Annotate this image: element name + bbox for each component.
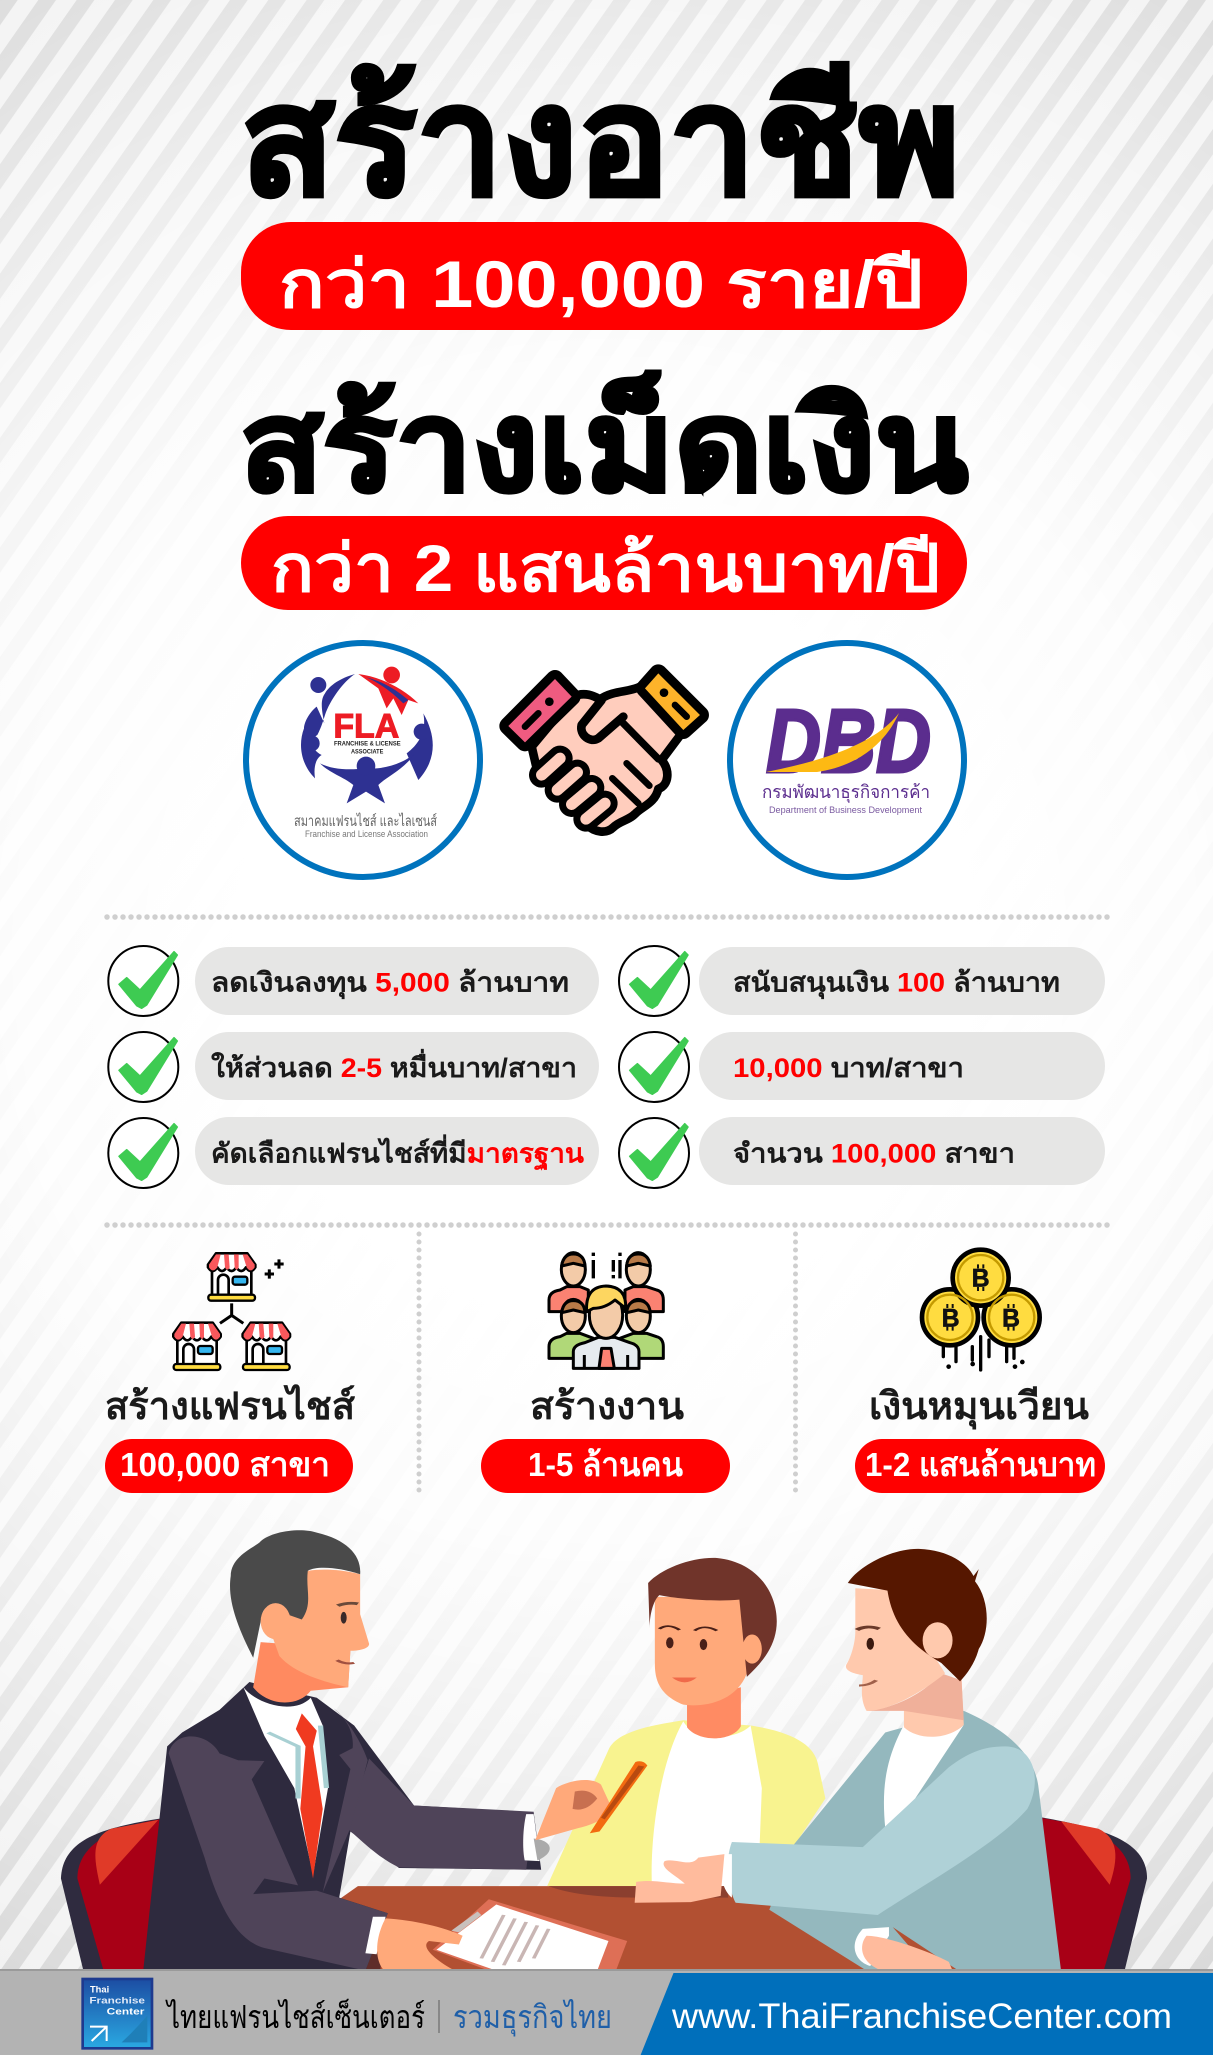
clipboard with document — [365, 1899, 627, 1971]
footer bar — [0, 1969, 1213, 2055]
checklist row 2 right — [619, 1032, 1105, 1102]
red pill: 100,000 jobs a year: กว่า 100,000 ราย/ปี — [279, 247, 923, 321]
chair right — [1039, 1817, 1147, 1971]
red pill: 2 hundred thousand million baht a year — [241, 516, 967, 610]
icon: FLA ring of figures: ASSOCIATE — [351, 749, 383, 755]
logo: FLA association badge — [246, 643, 480, 877]
stat column: franchises: 100,000 สาขา — [120, 1446, 330, 1483]
stat column: circulation — [855, 1250, 1105, 1493]
checklist row 3 left: คัดเลือกแฟรนไชส์ที่มี มาตรฐาน — [211, 1134, 585, 1172]
stat column: circulation: 1-2 แสนล้านบาท — [865, 1446, 1096, 1483]
checklist row 3 right: จำนวน 100,000 สาขา — [733, 1138, 1015, 1168]
checklist row 3 left — [108, 1117, 599, 1188]
title: second headline: สร้างเม็ดเงิน — [240, 371, 968, 517]
logo: FLA association badge: สมาคมแฟรนไชส์ และไลเซนส์ — [294, 812, 437, 830]
logo: DBD badge: Department of Business Development — [769, 805, 923, 815]
stat column: jobs: 1-5 ล้านคน — [528, 1446, 683, 1483]
red pill: 2 hundred thousand million baht a year: กว่า 2 แสนล้านบาท/ปี — [271, 531, 940, 605]
checklist row 1 left — [108, 946, 599, 1016]
icon: group of people — [549, 1253, 663, 1368]
icon: bitcoin coins: B — [942, 1305, 960, 1332]
checklist row 2 right: 10,000 บาท/สาขา — [733, 1053, 964, 1083]
footer bar: www.ThaiFranchiseCenter.com — [671, 1997, 1172, 2036]
footer bar: รวมธุรกิจไทย — [453, 1999, 612, 2037]
checklist row 3 right — [619, 1117, 1105, 1188]
logo: Thai Franchise Center: Franchise — [89, 1995, 145, 2005]
icon: FLA ring of figures: FRANCHISE & LICENSE — [334, 741, 401, 747]
icon: bitcoin coins — [922, 1250, 1040, 1370]
title: first headline: สร้างอาชีพ — [241, 57, 960, 227]
checklist row 2 left — [108, 1032, 599, 1102]
footer bar: ไทยแฟรนไชส์เซ็นเตอร์ — [165, 1998, 425, 2035]
stat column: jobs — [481, 1253, 730, 1493]
table — [236, 1886, 960, 1971]
checklist row 1 left: ลดเงินลงทุน 5,000 ล้านบาท — [211, 968, 569, 1000]
person: centre man — [547, 1558, 825, 1886]
stat column: circulation: เงินหมุนเวียน — [869, 1386, 1089, 1430]
icon: franchise stores — [173, 1253, 290, 1370]
stat column: franchises: สร้างแฟรนไชส์ — [105, 1384, 356, 1428]
logo: DBD badge: กรมพัฒนาธุรกิจการค้า — [762, 782, 930, 803]
stat column: franchises — [105, 1253, 356, 1493]
logo: DBD badge: DBD — [766, 692, 931, 792]
icon: bitcoin coins: B — [1002, 1305, 1020, 1332]
icon: FLA ring of figures — [301, 667, 433, 803]
checklist row 1 right: สนับสนุนเงิน 100 ล้านบาท — [733, 968, 1060, 1000]
checklist row 1 right — [619, 946, 1105, 1016]
logo: Thai Franchise Center: Thai — [90, 1984, 109, 1994]
illustration: business meeting — [61, 1530, 1147, 1971]
logo: DBD badge — [730, 643, 964, 877]
checklist row 2 left: ให้ส่วนลด 2-5 หมื่นบาท/สาขา — [211, 1048, 577, 1083]
icon: bitcoin coins: B — [972, 1266, 990, 1293]
stat column: jobs: สร้างงาน — [530, 1386, 684, 1428]
icon: FLA ring of figures: FLA — [333, 707, 399, 745]
icon: handshake — [508, 673, 700, 832]
person: man in teal jacket — [635, 1549, 1061, 1971]
person: man in dark suit — [143, 1530, 647, 1971]
logo: FLA association badge: Franchise and License Association — [305, 829, 428, 840]
red pill: 100,000 jobs a year — [241, 222, 967, 330]
logo: Thai Franchise Center: Center — [107, 2006, 145, 2016]
logo: Thai Franchise Center — [83, 1979, 152, 2048]
chair left — [61, 1819, 160, 1971]
